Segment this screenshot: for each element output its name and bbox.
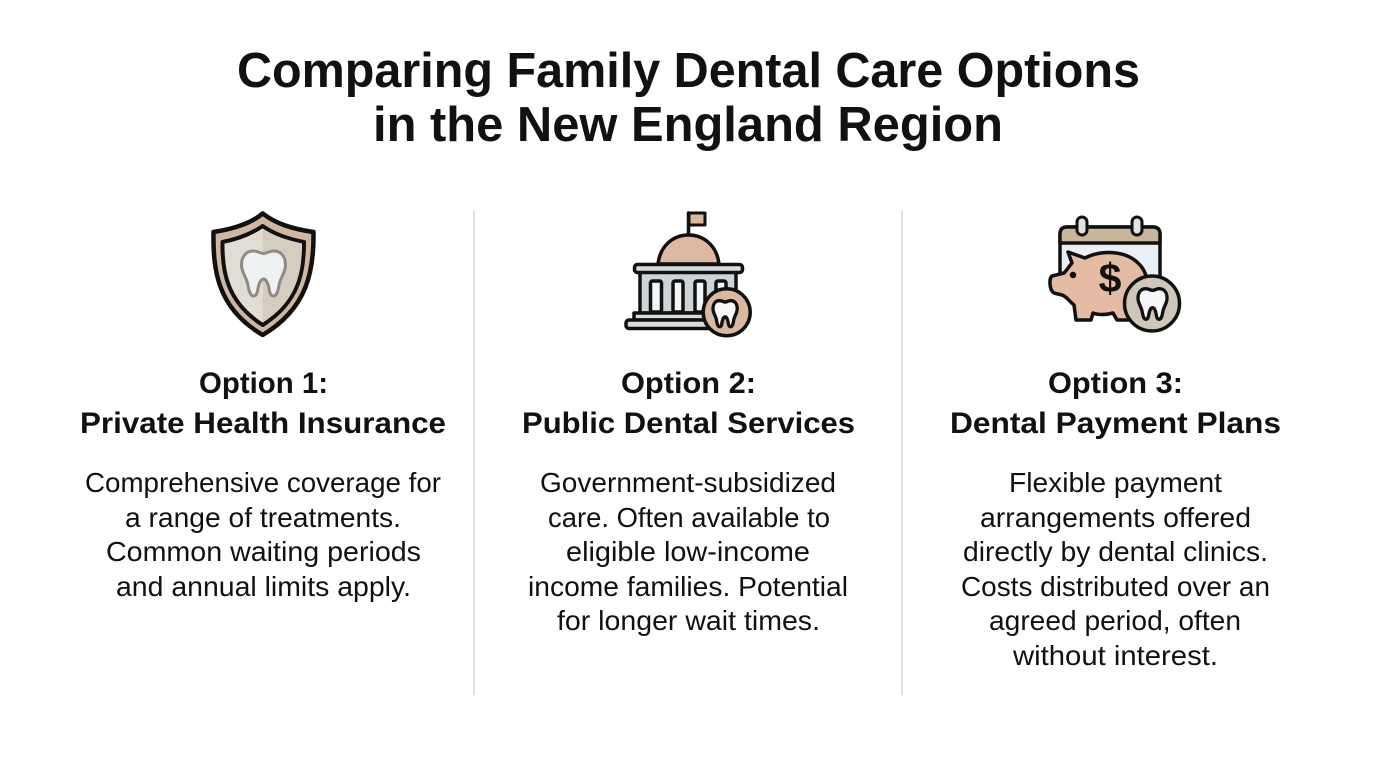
heading: option 3: Option 3: [1048, 367, 1183, 400]
text: option 3 description: arrangements offered [980, 502, 1251, 533]
icon: government building with tooth badge [626, 213, 750, 336]
heading: option 2 [522, 367, 855, 440]
text: option 3 description [961, 467, 1270, 671]
text: option 1 description: a range of treatments. [125, 502, 401, 533]
heading: option 1: Private Health Insurance [80, 407, 446, 440]
title: in the New England Region [373, 98, 1003, 152]
text: option 1 description: Common waiting periods [106, 536, 421, 567]
text: option 2 description: care. Often available to [548, 502, 830, 533]
text: option 1 description: and annual limits apply. [116, 571, 411, 602]
title [237, 44, 1140, 152]
text: option 2 description: for longer wait times. [557, 605, 820, 636]
text: option 2 description [528, 467, 848, 636]
text: option 1 description: Comprehensive coverage for [85, 467, 441, 498]
panel: option 1 private health insurance [80, 214, 446, 602]
heading: option 2: Public Dental Services [522, 407, 855, 440]
icon: shield with tooth [213, 214, 314, 335]
heading: option 2: Option 2: [621, 367, 756, 400]
heading: option 1: Option 1: [199, 367, 328, 400]
text: option 3 description: agreed period, often [989, 605, 1241, 636]
icon: dollar sign: $ [1099, 255, 1122, 301]
text: option 3 description: directly by dental clinics. [963, 536, 1268, 567]
heading: option 1 [80, 367, 446, 440]
text: option 3 description: Flexible payment [1009, 467, 1222, 498]
text: option 2 description: Government-subsidized [540, 467, 836, 498]
text: option 3 description: Costs distributed over an [961, 571, 1270, 602]
panel: option 2 public dental services [522, 213, 855, 636]
title: Comparing Family Dental Care Options [237, 44, 1140, 98]
text: option 3 description: without interest. [1012, 640, 1218, 671]
panel: option 3 dental payment plans [950, 217, 1281, 671]
text: option 1 description [85, 467, 441, 602]
text: option 2 description: income families. Potential [528, 571, 848, 602]
text: option 2 description: eligible low-income [566, 536, 810, 567]
heading: option 3: Dental Payment Plans [950, 407, 1281, 440]
icon: piggy bank with calendar and tooth badge [1050, 217, 1180, 331]
heading: option 3 [950, 367, 1281, 440]
